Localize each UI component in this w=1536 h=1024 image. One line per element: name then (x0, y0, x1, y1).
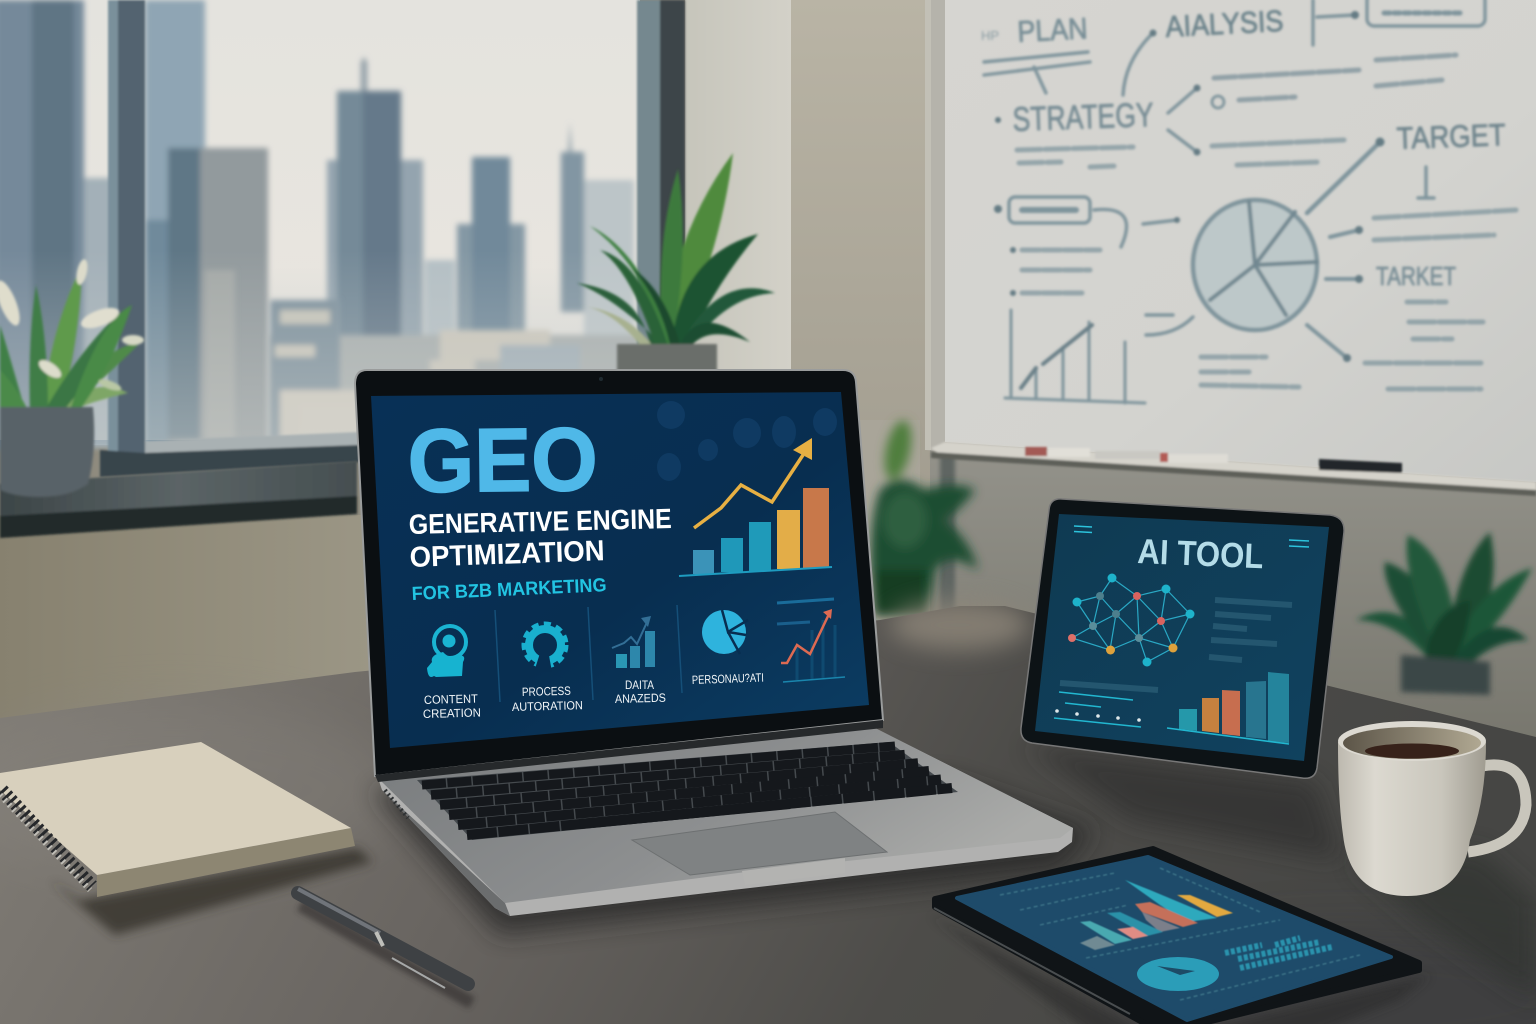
laptop (355, 370, 1095, 935)
tablet body (1021, 499, 1344, 778)
subtitle line 2: OPTIMIZATION (409, 535, 605, 574)
title: GEO: GEO (407, 410, 598, 512)
plant on left windowsill (0, 258, 144, 497)
laptop lid (355, 370, 883, 782)
separators (495, 605, 682, 702)
pot (1401, 655, 1490, 695)
flat tablet screen (957, 857, 1391, 1020)
coffee (1365, 744, 1459, 758)
heading: strategy: STRATEGY (1012, 96, 1154, 139)
window sill (0, 461, 357, 538)
tablet shadow (930, 915, 1430, 1024)
label: content creation: CONTENT (424, 692, 479, 707)
laptop base (378, 728, 1073, 916)
heading: analysis: AIALYSIS (1165, 5, 1284, 44)
neural network graph (1068, 574, 1194, 666)
whiteboard (925, 0, 1536, 496)
tablet shadow (1025, 745, 1340, 860)
laptop shadow (372, 780, 1095, 935)
label: personalization: PERSONAU?ATI (692, 670, 764, 687)
desk surface (0, 600, 1536, 1024)
screen menu icons (1074, 526, 1309, 547)
mug body (1338, 742, 1486, 896)
plant behind laptop by window (577, 153, 775, 374)
mug shadow (1350, 850, 1536, 1000)
mug rim (1338, 721, 1486, 761)
growth bar chart (679, 488, 832, 576)
area chart (1080, 880, 1233, 950)
heading: target: TARGET (1396, 117, 1506, 156)
heading: second target: TARKET (1376, 261, 1456, 291)
icon: content creation (427, 626, 466, 677)
label: data analysis (615, 678, 666, 706)
whiteboard tray and markers (931, 442, 1536, 496)
small note: HP (981, 28, 999, 43)
label: process automation: PROCESS (522, 684, 571, 699)
skyline buildings (0, 0, 634, 450)
blurred plant on right (1356, 532, 1532, 695)
label: content creation: CREATION (423, 705, 481, 721)
cover (0, 742, 351, 875)
text placeholder bars (1060, 600, 1292, 690)
label: process automation: AUTORATION (512, 698, 583, 714)
growth arrow (694, 438, 812, 528)
pages edge (97, 828, 355, 897)
spiral binding (0, 790, 92, 890)
mug handle (1468, 765, 1526, 852)
pot (617, 344, 717, 374)
window with blurred city skyline (0, 0, 685, 538)
heading: plan: PLAN (1017, 12, 1088, 49)
slider lines and dots (1054, 692, 1141, 727)
standing tablet: AI tool (1021, 499, 1344, 860)
tablet body (935, 849, 1419, 1024)
blurred plant behind desk (871, 418, 978, 616)
decorative dots (657, 401, 837, 481)
label: process automation (512, 684, 583, 714)
icon: process gear (524, 624, 566, 672)
window frame (100, 0, 685, 477)
plant leaves (0, 258, 144, 414)
pen (298, 889, 472, 1003)
keyboard (417, 742, 958, 840)
whiteboard handwriting (981, 0, 1516, 403)
whiteboard pie chart (1193, 200, 1317, 330)
flat tablet on desk (930, 849, 1430, 1024)
label: content creation (423, 692, 481, 721)
plant pot (0, 407, 94, 497)
hinge notch (742, 858, 845, 885)
laptop screen (371, 392, 869, 748)
icon: personalization pie (702, 610, 748, 654)
subtitle line 1: GENERATIVE ENGINE (408, 503, 672, 540)
notebook (0, 742, 372, 935)
icon: data analysis (612, 616, 655, 668)
shadow (50, 848, 372, 935)
leaves (577, 153, 775, 345)
icon: trend chart (777, 599, 845, 682)
mini bars (1225, 938, 1332, 968)
trackpad (632, 812, 887, 875)
tagline: FOR BZB MARKETING (411, 575, 607, 605)
tablet bar chart (1167, 672, 1289, 744)
label: data analysis: DAITA (625, 678, 654, 692)
tablet screen (1035, 514, 1329, 761)
donut chart (1137, 957, 1219, 991)
label: data analysis: ANAZEDS (615, 691, 666, 706)
city haze (205, 270, 640, 440)
title: AI TOOL: AI TOOL (1137, 532, 1264, 576)
coffee mug (1338, 721, 1536, 1000)
